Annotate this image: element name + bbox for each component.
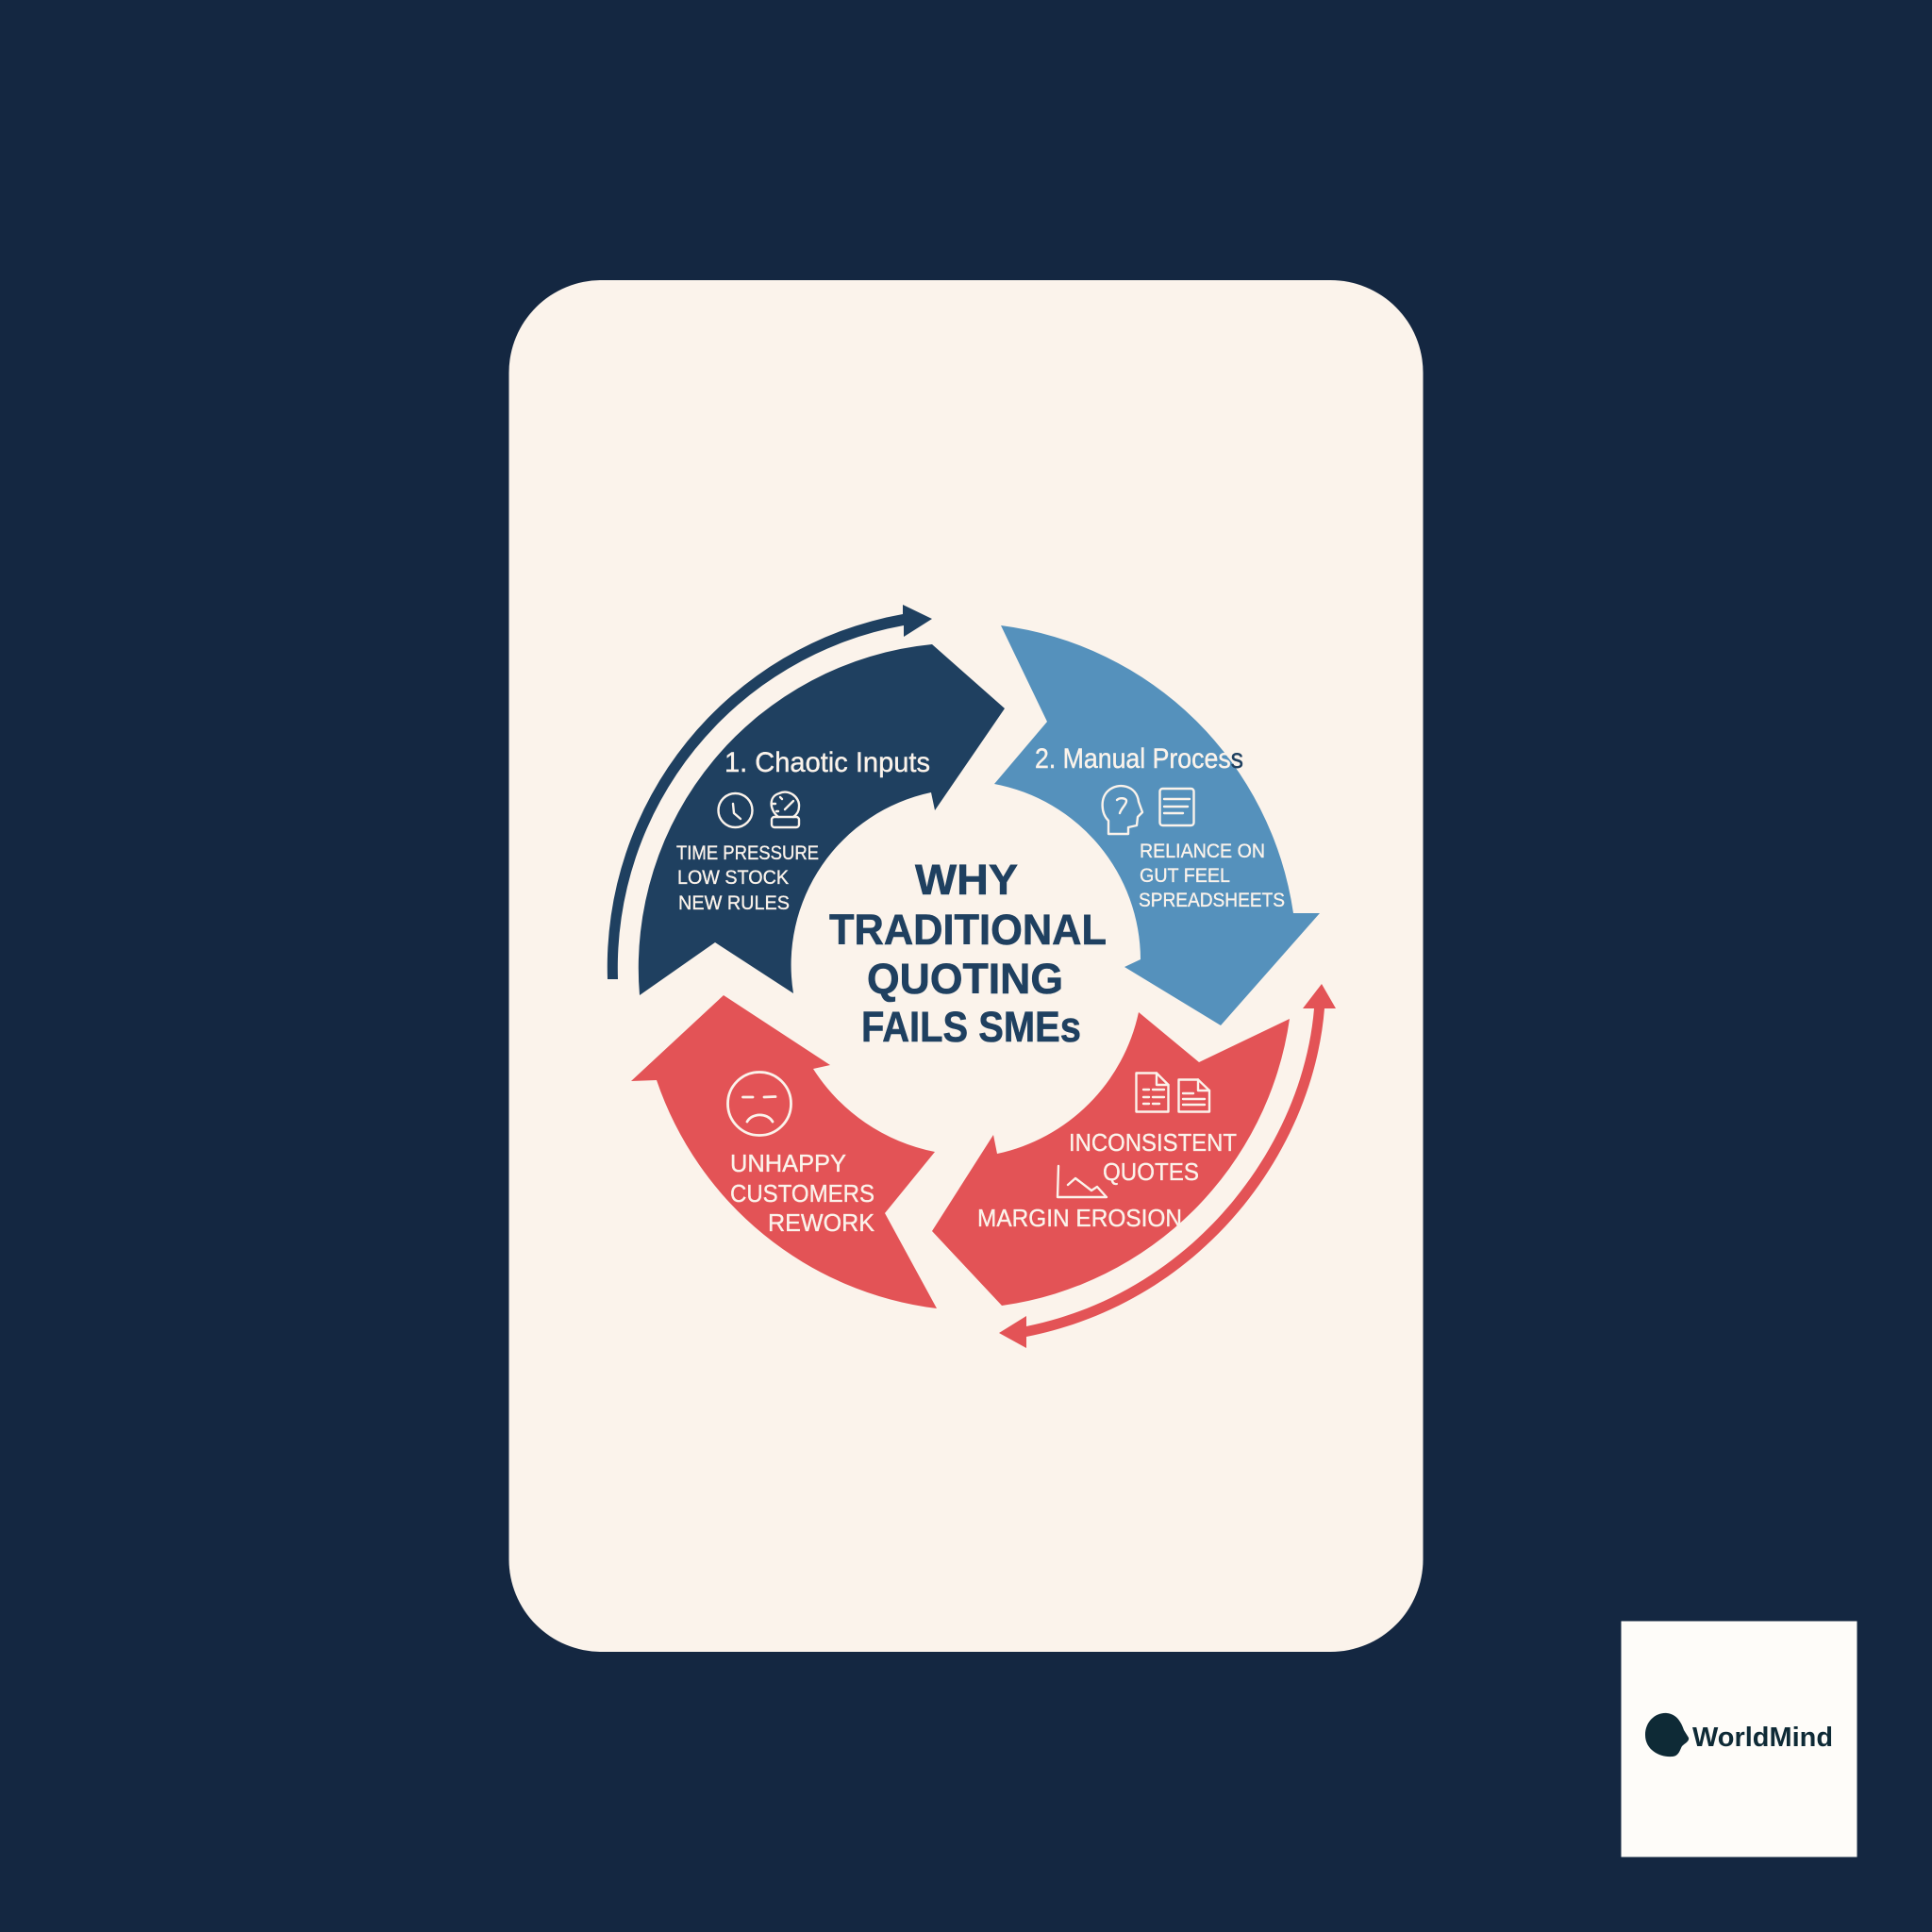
icon: table document (1136, 1074, 1168, 1111)
title: WHY (915, 856, 1018, 904)
logo wordmark: WorldMind (1692, 1723, 1833, 1753)
title: TRADITIONAL (829, 906, 1107, 954)
arrow: thin red arc (999, 984, 1336, 1348)
text: manual process list: GUT FEEL (1140, 865, 1230, 887)
text: chaotic inputs list: NEW RULES (678, 892, 790, 914)
icon: sad face (728, 1072, 791, 1136)
panel: 1 chaotic inputs arrow (639, 644, 1005, 995)
icon: text document (1179, 1079, 1209, 1111)
text: chaotic inputs list (676, 842, 819, 914)
heading: manual process: 2. Manual Process (1035, 743, 1243, 774)
panel: 2 manual process arrow (994, 625, 1320, 1025)
text: manual process list: RELIANCE ON (1140, 841, 1265, 862)
icon: gauge (772, 792, 799, 827)
text: manual process list: SPREADSHEETS (1139, 890, 1285, 911)
text: unhappy customers rework (730, 1149, 875, 1237)
text: inconsistent quotes: QUOTES (1103, 1158, 1199, 1186)
text: chaotic inputs list: TIME PRESSURE (676, 842, 819, 864)
text: unhappy customers rework: REWORK (768, 1208, 875, 1237)
panel: 3 inconsistent quotes arrow (932, 1012, 1290, 1306)
title: FAILS SMEs (861, 1003, 1081, 1051)
icon: falling chart (1058, 1166, 1107, 1197)
title (829, 856, 1107, 1051)
text: unhappy customers rework: UNHAPPY (730, 1149, 846, 1177)
icon: document lines (1160, 789, 1194, 825)
text: inconsistent quotes: INCONSISTENT (1069, 1128, 1237, 1157)
arrow: thin navy arc (608, 605, 932, 979)
text: margin erosion: MARGIN EROSION (977, 1204, 1182, 1232)
logo: WorldMind badge (1621, 1621, 1857, 1857)
panel: 4 unhappy customers arrow (631, 995, 937, 1308)
text: unhappy customers rework: CUSTOMERS (730, 1179, 874, 1208)
text: manual process list (1139, 841, 1285, 911)
title: QUOTING (867, 955, 1063, 1003)
heading: chaotic inputs: 1. Chaotic Inputs (724, 747, 930, 778)
cycle diagram (608, 605, 1336, 1348)
text: chaotic inputs list: LOW STOCK (677, 867, 789, 889)
icon: clock (719, 793, 753, 827)
text: inconsistent quotes (1069, 1128, 1237, 1186)
icon: head silhouette (1645, 1713, 1689, 1757)
icon: head with question mark (1103, 786, 1142, 834)
panel: cream card (509, 280, 1423, 1652)
